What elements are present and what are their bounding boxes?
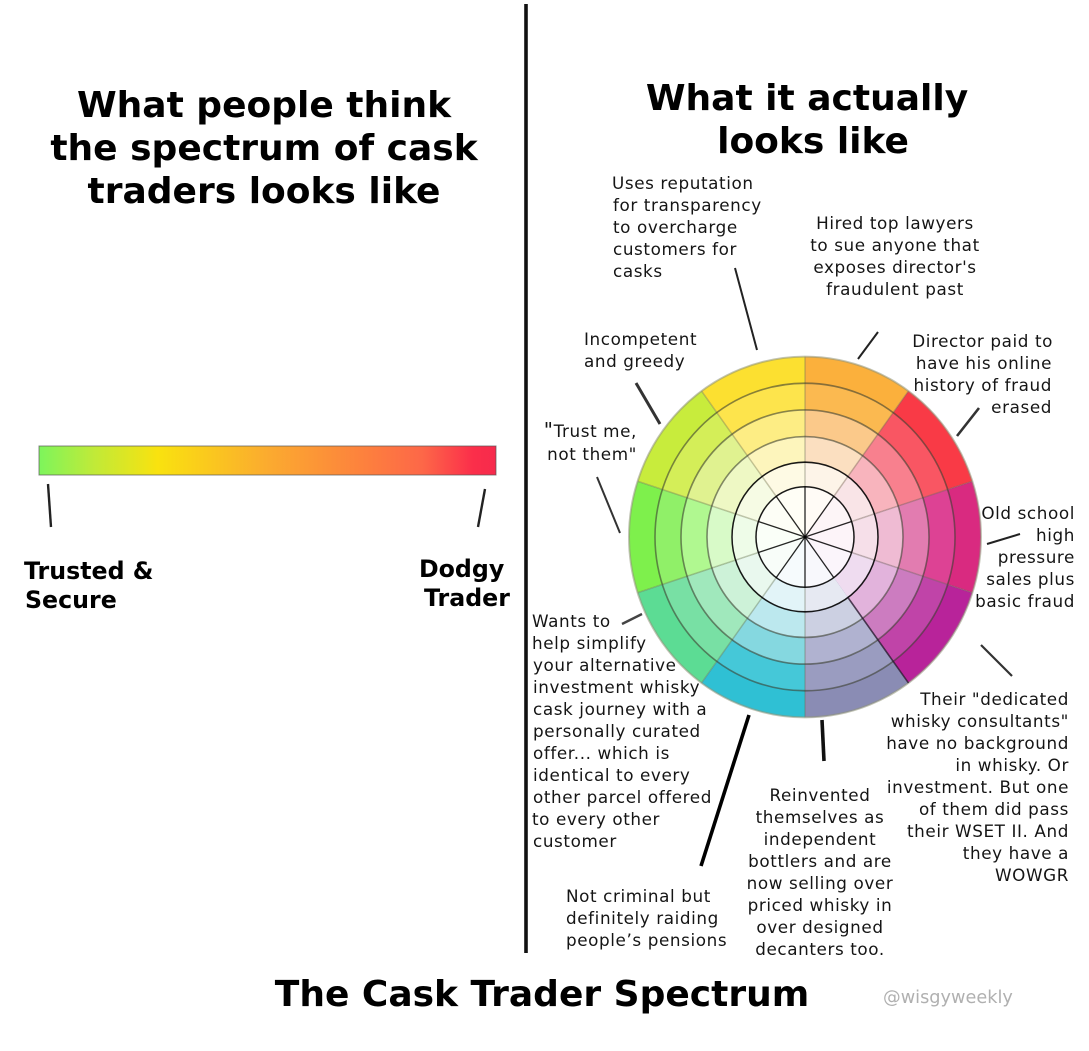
arrow: dodgy end (478, 489, 485, 527)
annotation: reinvented: priced whisky in (748, 895, 892, 915)
wheel sector: yellow (702, 329, 889, 537)
annotation: dedicated consultants: in whisky. Or (955, 755, 1069, 775)
wheel sector: orange (805, 357, 908, 537)
left heading: What people think (77, 85, 452, 126)
annotation: reinvented: over designed (756, 917, 884, 937)
annotation: reputation: casks (613, 261, 663, 281)
arrow: incompetent (636, 383, 660, 424)
annotation: reputation: customers for (613, 239, 737, 259)
annotation: not criminal: people’s pensions (566, 930, 727, 950)
annotation: wants to: help simplify (532, 633, 647, 653)
annotation: wants to: identical to every (533, 765, 690, 785)
left heading: the spectrum of cask (50, 128, 479, 169)
wheel grid: concentric ring lines (629, 357, 981, 717)
annotation: dedicated consultants: their WSET II. And (907, 821, 1069, 841)
left heading (50, 85, 479, 212)
annotation: dedicated consultants: Their "dedicated (919, 689, 1069, 709)
arrow: not criminal (701, 715, 749, 866)
annotation: dedicated consultants: they have a (963, 843, 1069, 863)
arrow: reputation (735, 268, 757, 350)
annotation: wants to: Wants to (532, 611, 611, 631)
annotation: reputation: to overcharge (613, 217, 738, 237)
annotation: old school: Old school (981, 503, 1075, 523)
label: trusted and secure (24, 557, 153, 614)
right heading: looks like (717, 121, 909, 162)
annotation: reinvented: bottlers and are (748, 851, 892, 871)
right heading: What it actually (646, 78, 968, 119)
annotation: reinvented: decanters too. (755, 939, 885, 959)
wheel grid: black centre spokes (758, 487, 852, 587)
arrow: reinvented (822, 720, 824, 761)
annotation: dedicated consultants: investment. But one (887, 777, 1069, 797)
wheel grid: spokes between sectors (638, 357, 972, 717)
annotation: wants to: offer... which is (533, 743, 670, 763)
annotation: reinvented: themselves as (756, 807, 884, 827)
wheel sector: sea green (618, 475, 805, 683)
annotation: trust me: "Trust me, (544, 418, 637, 442)
annotation: old school: sales plus (986, 569, 1075, 589)
annotation: reinvented: now selling over (747, 873, 893, 893)
annotation: lawyers: Hired top lawyers (816, 213, 974, 233)
annotation: wants to: cask journey with a (533, 699, 707, 719)
arrow: old school (987, 534, 1020, 544)
annotation: wants to: customer (533, 831, 617, 851)
annotation: lawyers: to sue anyone that (810, 235, 980, 255)
wheel sector: purple (773, 537, 972, 694)
arrow: trust me (597, 477, 620, 533)
annotation: incompetent: Incompetent (584, 329, 697, 349)
annotation: lawyers: fraudulent past (826, 279, 964, 299)
annotation: not criminal: Not criminal but (566, 886, 711, 906)
annotation: wants to: personally curated (533, 721, 701, 741)
annotation: trust me: not them" (547, 444, 637, 464)
annotation: director: erased (991, 397, 1052, 417)
annotation: director: have his online (916, 353, 1052, 373)
bottom title: The Cask Trader Spectrum (275, 974, 809, 1015)
annotation: reputation: Uses reputation (612, 173, 754, 193)
annotation: old school: high (1036, 525, 1075, 545)
watermark: @wisgyweekly (883, 988, 1013, 1008)
annotation: old school: basic fraud (975, 591, 1075, 611)
annotation: reinvented: independent (764, 829, 876, 849)
wheel sector: teal (702, 537, 805, 717)
annotation: not criminal: definitely raiding (566, 908, 719, 928)
label: dodgy trader: Dodgy (419, 555, 505, 583)
label: trusted and secure: Trusted & (24, 557, 153, 585)
annotation: lawyers: exposes director's (813, 257, 977, 277)
gradient spectrum bar (39, 446, 496, 475)
wheel sector: slate (721, 537, 908, 745)
colour wheel (606, 329, 1004, 745)
right heading (646, 78, 968, 162)
annotation: incompetent: and greedy (584, 351, 685, 371)
arrow: director (957, 408, 979, 436)
annotation: director: Director paid to (912, 331, 1053, 351)
left heading: traders looks like (88, 171, 440, 212)
annotation: wants to: investment whisky (533, 677, 700, 697)
annotation: wants to: to every other (532, 809, 660, 829)
wheel sector: green (606, 436, 805, 593)
wheel grid: dark slate boundary (848, 598, 908, 683)
wheel sector: yellow green (638, 380, 837, 537)
wheel sector: red (805, 391, 992, 599)
annotation: old school: pressure (998, 547, 1075, 567)
annotation: wants to: other parcel offered (533, 787, 712, 807)
annotation: dedicated consultants: whisky consultants" (891, 711, 1069, 731)
annotation: dedicated consultants: WOWGR (995, 865, 1069, 885)
arrow: trusted end (48, 484, 51, 527)
central divider line (524, 4, 528, 953)
arrow: lawyers (858, 332, 878, 359)
annotation: reinvented: Reinvented (770, 785, 870, 805)
arrow: dedicated consultants (981, 645, 1012, 676)
annotation: reputation: for transparency (613, 195, 762, 215)
label: trusted and secure: Secure (25, 586, 117, 614)
annotation: dedicated consultants: of them did pass (919, 799, 1069, 819)
arrow: wants to (622, 614, 642, 624)
label: dodgy trader (419, 555, 510, 612)
wheel sector: magenta (805, 481, 1004, 638)
annotation: dedicated consultants: have no background (886, 733, 1069, 753)
annotation: wants to: your alternative (533, 655, 677, 675)
annotation: director: history of fraud (913, 375, 1052, 395)
label: dodgy trader: Trader (424, 584, 510, 612)
